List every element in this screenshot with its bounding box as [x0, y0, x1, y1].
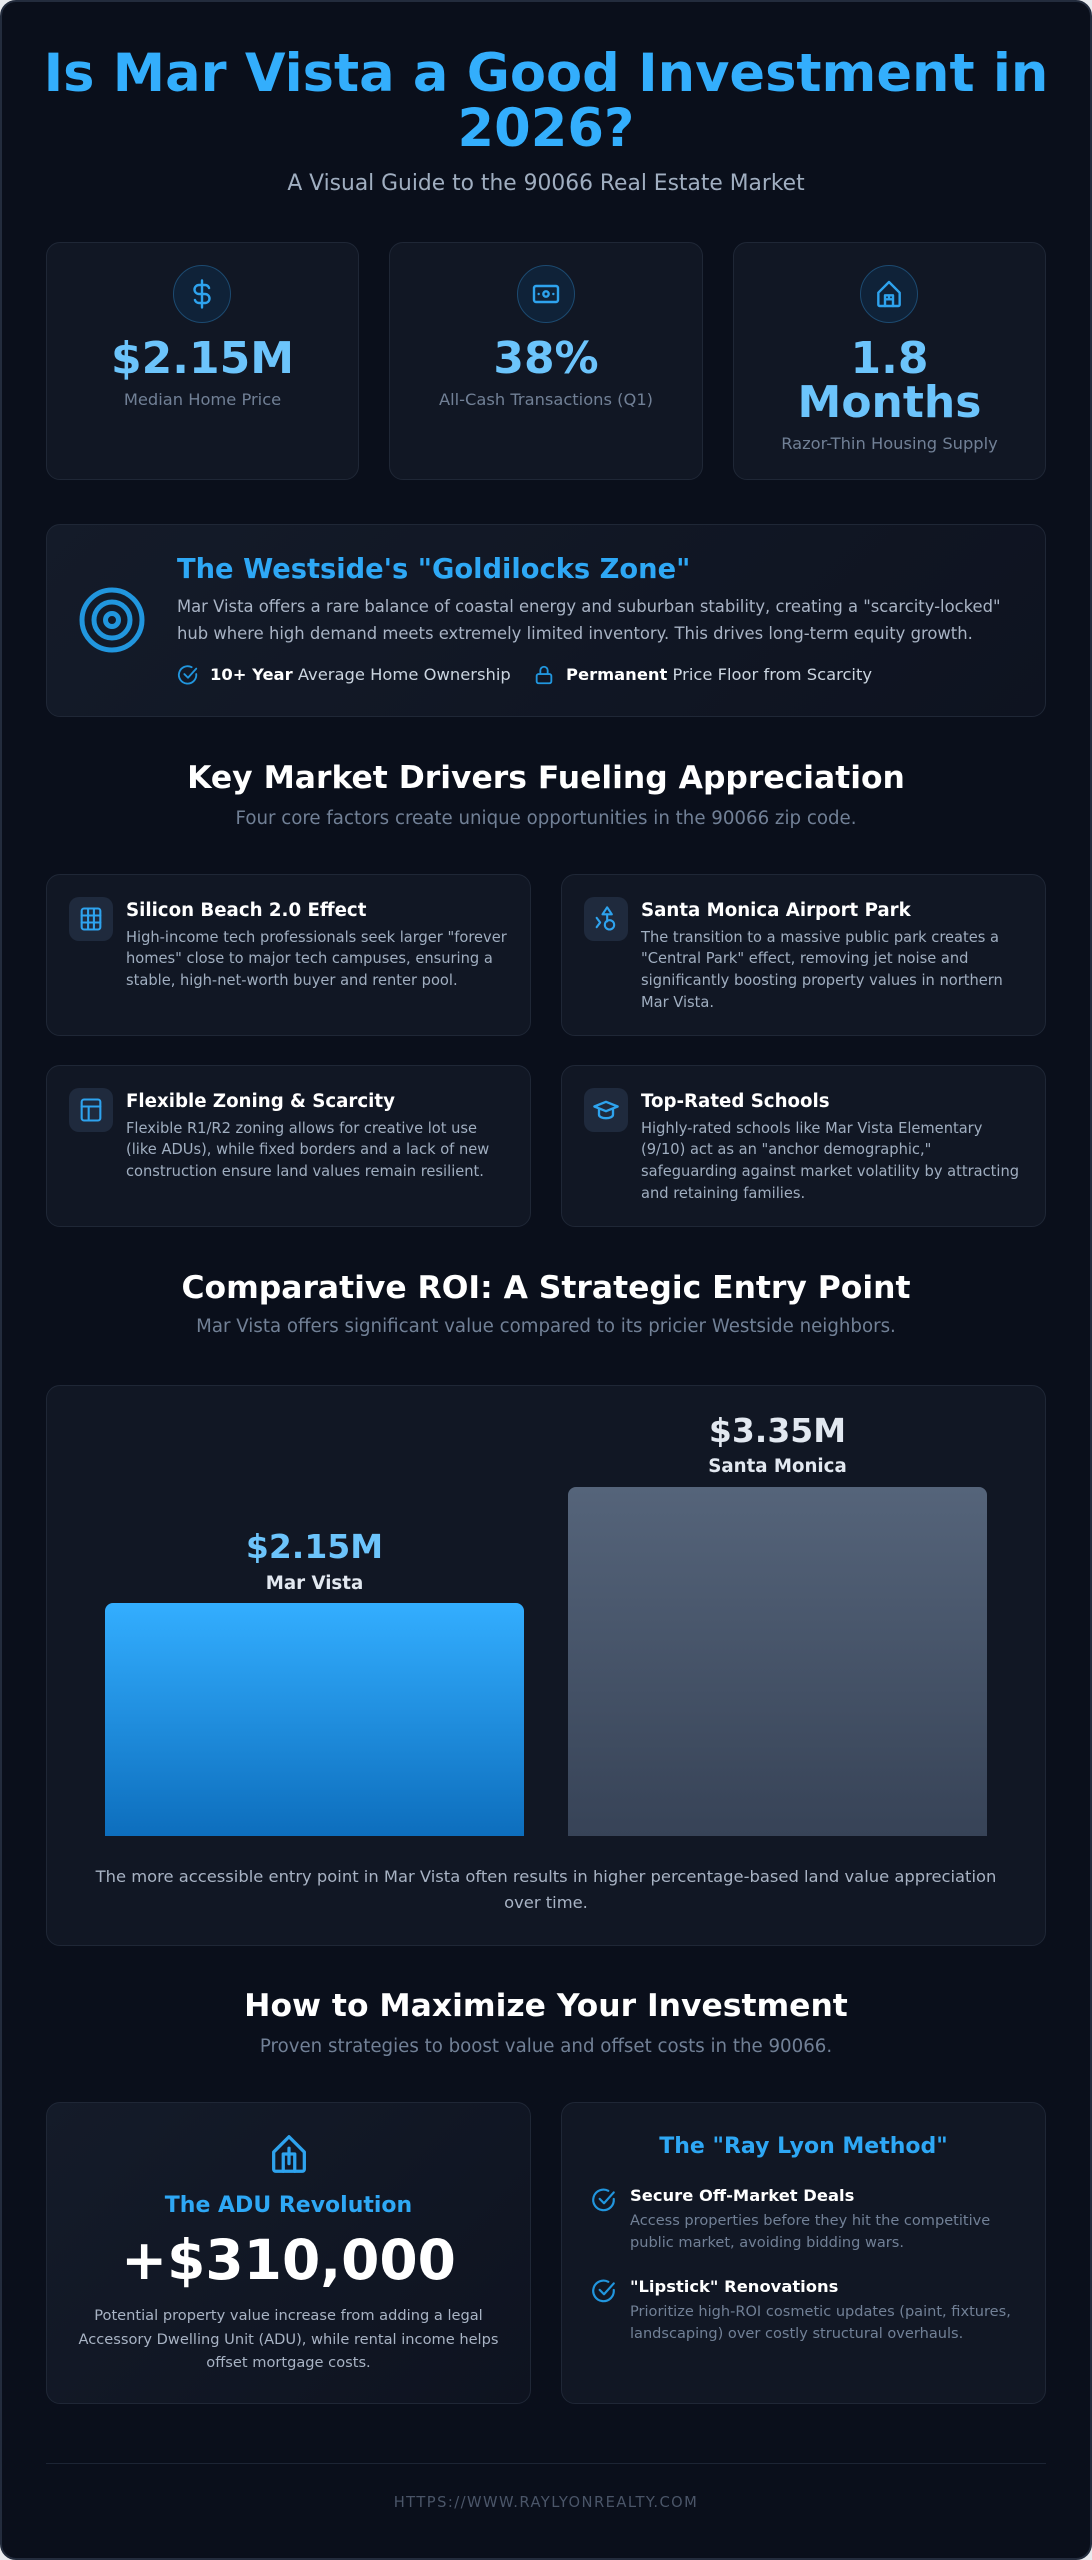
method item title: Secure Off-Market Deals	[630, 2186, 854, 2205]
driver text: High-income tech professionals seek larger "forever	[126, 928, 507, 946]
panel: stat housing supply	[733, 242, 1046, 480]
method item text	[630, 2302, 1011, 2342]
method heading: The "Ray Lyon Method"	[659, 2134, 948, 2159]
icon: check	[592, 2280, 615, 2302]
heading: The Westside's "Goldilocks Zone"	[177, 554, 690, 584]
icon: layout	[69, 1088, 113, 1132]
driver text: "Central Park" effect, removing jet noise and	[641, 950, 968, 967]
stat value: Months	[798, 377, 981, 428]
icon: dollar	[173, 265, 231, 323]
label: Mar Vista: Mar Vista	[266, 1573, 363, 1594]
panel: Flexible Zoning	[46, 1065, 531, 1227]
chart note: The more accessible entry point in Mar Vista often results in higher percentage-based land value appreciation	[96, 1867, 996, 1886]
title: 2026?	[458, 98, 634, 158]
driver text: safeguarding against market volatility by attracting	[641, 1163, 1019, 1180]
icon: park	[584, 897, 628, 941]
method item text: landscaping) over costly structural overhauls.	[630, 2324, 963, 2342]
chart note	[96, 1867, 996, 1912]
ADU text: Accessory Dwelling Unit (ADU), while rental income helps	[79, 2331, 498, 2348]
stat label: All-Cash Transactions (Q1)	[439, 390, 653, 409]
driver text: construction ensure land values remain resilient.	[126, 1163, 484, 1180]
panel: Silicon Beach	[46, 874, 531, 1036]
subheading: maximize investment: Proven strategies to boost value and offset costs in the 90066.	[260, 2036, 832, 2057]
stat label: Razor-Thin Housing Supply	[781, 434, 998, 453]
driver text: (9/10) act as an "anchor demographic,"	[641, 1141, 931, 1158]
stat value: $2.15M	[111, 333, 294, 384]
stat label: Median Home Price	[124, 390, 281, 409]
panel: Santa Monica Airport Park	[561, 874, 1046, 1036]
paragraph	[177, 597, 1001, 642]
bar: Santa Monica	[568, 1487, 987, 1836]
ADU value: +$310,000	[121, 2228, 456, 2292]
driver text: and retaining families.	[641, 1185, 805, 1202]
driver text: Highly-rated schools like Mar Vista Elementary	[641, 1120, 982, 1136]
heading: comparative ROI: Comparative ROI: A Strategic Entry Point	[181, 1270, 910, 1306]
panel: Goldilocks zone	[46, 524, 1046, 717]
value: Mar Vista: $2.15M	[246, 1527, 383, 1566]
panel: stat median home price	[46, 242, 359, 480]
heading: market drivers: Key Market Drivers Fueling Appreciation	[187, 760, 905, 796]
subtitle: A Visual Guide to the 90066 Real Estate Market	[287, 171, 805, 196]
method item text: public market, avoiding bidding wars.	[630, 2234, 904, 2250]
driver text: homes" close to major tech campuses, ensuring a	[126, 950, 493, 967]
panel: comparison chart	[46, 1385, 1046, 1946]
method item text	[630, 2212, 990, 2250]
driver text: The transition to a massive public park creates a	[641, 928, 999, 946]
panel: stat all-cash transactions	[389, 242, 703, 480]
panel: ADU revolution	[46, 2102, 531, 2404]
driver text: (like ADUs), while fixed borders and a lack of new	[126, 1141, 489, 1158]
chart note: over time.	[504, 1892, 588, 1912]
driver text	[641, 1120, 1019, 1202]
label: Santa Monica: Santa Monica	[708, 1456, 847, 1477]
driver title: Silicon Beach 2.0 Effect	[126, 900, 366, 921]
panel: Ray Lyon Method	[561, 2102, 1046, 2404]
bar: Mar Vista	[105, 1603, 524, 1836]
driver text: significantly boosting property values in northern	[641, 972, 1003, 989]
stat value: 1.8	[851, 333, 928, 384]
stat value: 38%	[493, 333, 599, 384]
title: Is Mar Vista a Good Investment in	[44, 42, 1048, 104]
heading: maximize investment: How to Maximize Your Investment	[244, 1988, 848, 2024]
icon: lock	[536, 666, 552, 684]
stat value	[798, 333, 981, 428]
ADU heading: The ADU Revolution	[165, 2193, 412, 2218]
subheading: market drivers: Four core factors create unique opportunities in the 90066 zip code.	[236, 808, 856, 829]
title	[44, 42, 1048, 158]
footer URL: HTTPS://WWW.RAYLYONREALTY.COM	[394, 2494, 698, 2511]
driver title: Santa Monica Airport Park	[641, 900, 911, 921]
driver text	[126, 928, 507, 989]
driver title: Flexible Zoning & Scarcity	[126, 1091, 395, 1112]
ADU text	[78, 2307, 498, 2371]
driver title: Top-Rated Schools	[641, 1091, 830, 1112]
driver text: stable, high-net-worth buyer and renter pool.	[126, 972, 458, 989]
paragraph: hub where high demand meets extremely limited inventory. This drives long-term equity growth.	[177, 624, 973, 642]
driver text	[126, 1120, 489, 1180]
icon: target	[80, 588, 144, 652]
driver text	[640, 928, 1003, 1011]
icon: check	[592, 2188, 615, 2212]
method item text: Access properties before they hit the competitive	[630, 2212, 990, 2228]
icon: grid	[69, 897, 113, 941]
icon: check	[178, 665, 198, 684]
paragraph: Mar Vista offers a rare balance of coastal energy and suburban stability, creating a "scarcity-locked"	[177, 597, 1001, 616]
icon: cash	[517, 265, 575, 323]
value: Santa Monica: $3.35M	[709, 1411, 846, 1450]
method item title: "Lipstick" Renovations	[630, 2277, 838, 2296]
driver text: Flexible R1/R2 zoning allows for creative lot use	[126, 1120, 477, 1136]
ADU text: offset mortgage costs.	[206, 2354, 371, 2371]
subheading: comparative ROI: Mar Vista offers significant value compared to its pricier Westside neighbors.	[196, 1316, 896, 1337]
ADU text: Potential property value increase from adding a legal	[94, 2307, 483, 2324]
stat: ownership: 10+ Year Average Home Ownership	[210, 665, 511, 684]
icon: graduation cap	[584, 1088, 628, 1132]
panel: Top-Rated Schools	[561, 1065, 1046, 1227]
method item text: Prioritize high-ROI cosmetic updates (paint, fixtures,	[630, 2302, 1011, 2320]
icon: house	[860, 265, 918, 323]
stat: price floor: Permanent Price Floor from Scarcity	[566, 665, 872, 684]
icon: ADU house	[272, 2135, 306, 2173]
driver text: Mar Vista.	[641, 994, 714, 1011]
